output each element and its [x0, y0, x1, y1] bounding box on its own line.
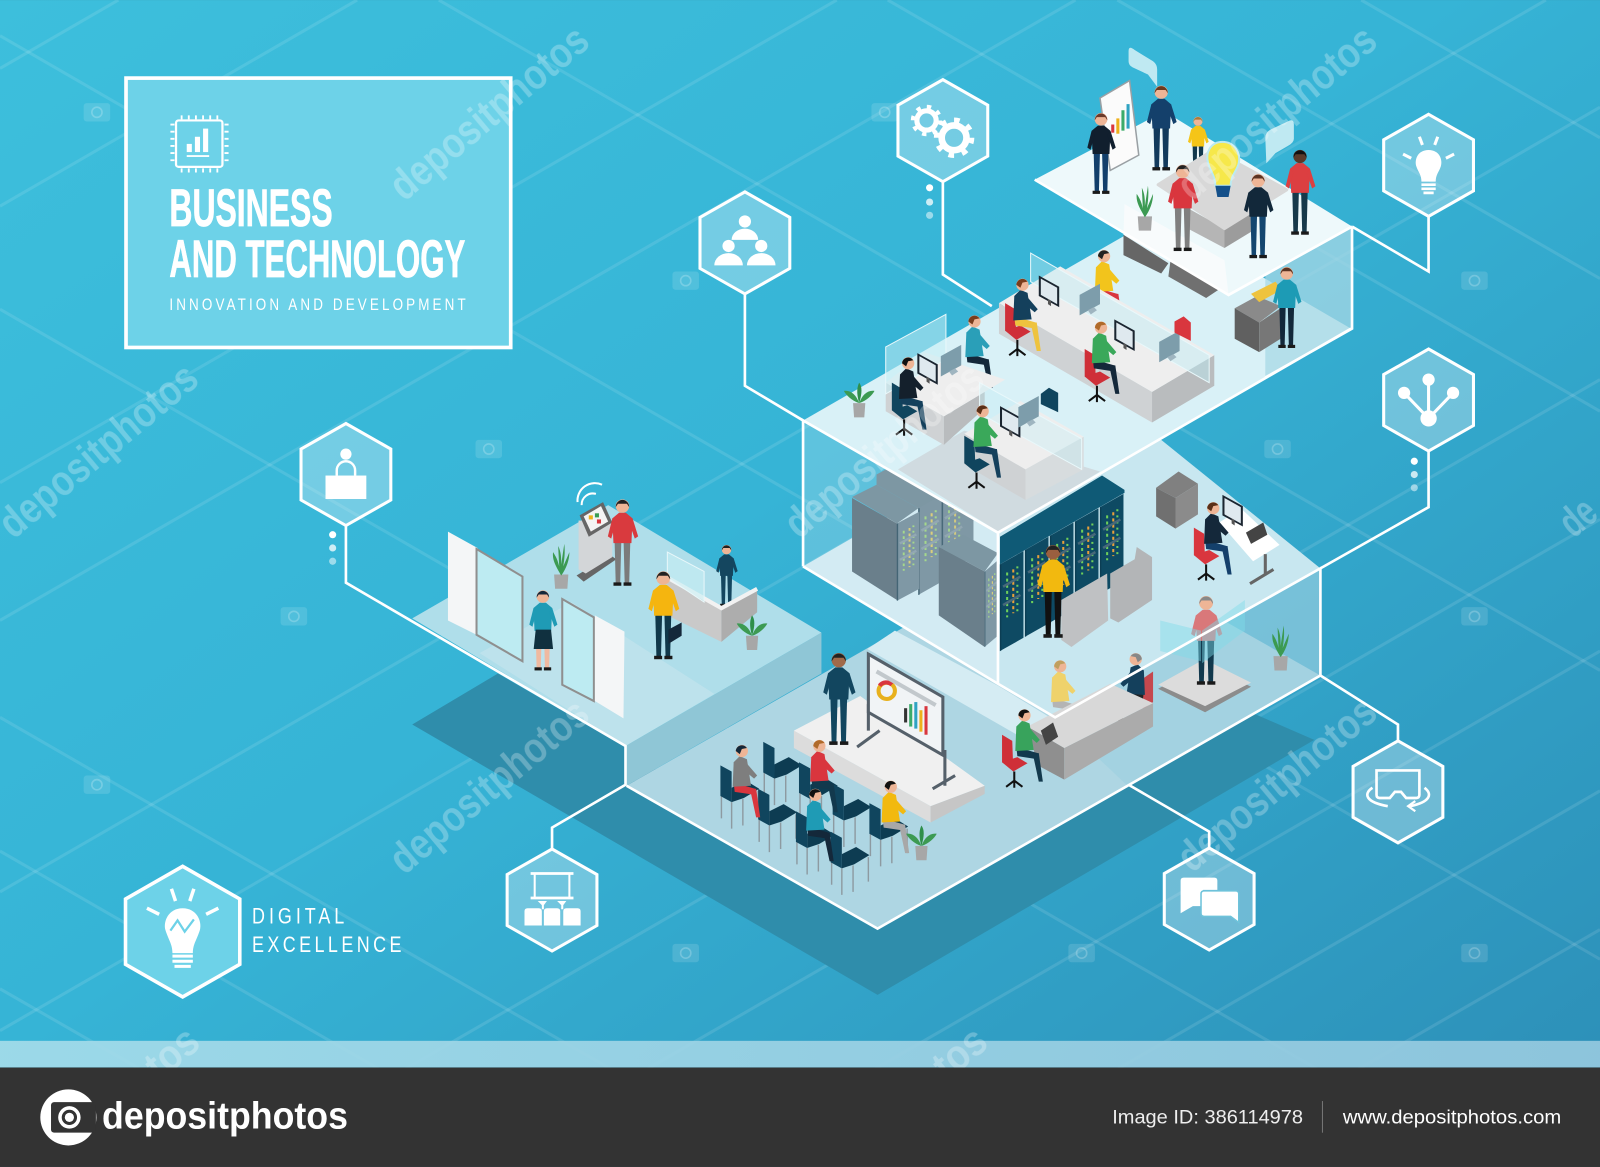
kiosk	[577, 502, 616, 582]
stage	[794, 696, 985, 822]
depositphotos logo	[40, 1089, 348, 1145]
VR platform	[1158, 659, 1251, 712]
speech bubble	[1129, 48, 1157, 87]
red chair	[1005, 303, 1031, 356]
back gray racks	[877, 461, 980, 595]
icon: chat bubbles	[1164, 848, 1254, 950]
holographic screens	[1160, 600, 1245, 663]
table	[1028, 684, 1153, 780]
icon: gears	[898, 80, 988, 182]
receptionist	[716, 545, 738, 606]
speech bubble	[1265, 120, 1294, 163]
white door panel right	[595, 615, 624, 718]
stock photo watermarks: tos	[923, 1016, 996, 1089]
icon: network	[1384, 349, 1473, 451]
room: server racks	[852, 461, 1280, 651]
icon: camera logo	[40, 1089, 96, 1145]
desk row C	[964, 383, 1084, 500]
digital excellence label: DIGITAL	[252, 905, 344, 929]
flipchart	[1100, 81, 1139, 170]
title panel	[126, 78, 511, 347]
structure outlines	[627, 180, 1352, 929]
floor: ground level	[627, 533, 1320, 929]
icon: reception	[301, 424, 391, 526]
technician in yellow	[1037, 545, 1070, 638]
programmer in black	[899, 357, 927, 430]
reception desk	[667, 552, 757, 642]
red chair back	[1143, 671, 1153, 709]
room: presentation	[720, 653, 985, 895]
monitors	[1039, 276, 1059, 307]
footer divider	[1322, 1101, 1323, 1133]
red chair	[1085, 349, 1110, 402]
plant	[1272, 626, 1289, 670]
glass door right	[562, 599, 594, 701]
image id: Image ID: 386114978	[1112, 1106, 1303, 1128]
white block	[1123, 204, 1229, 295]
plant	[737, 615, 767, 650]
glass door left	[477, 549, 522, 661]
person behind table	[1188, 117, 1209, 176]
digital excellence label: EXCELLENCE	[252, 933, 401, 958]
plant	[906, 826, 937, 860]
room: entrance lobby	[448, 483, 767, 718]
stock photo camera marks	[84, 103, 1488, 962]
stock photo watermarks: tos	[135, 1016, 209, 1089]
floor highlight	[867, 631, 1055, 737]
laptop	[1041, 722, 1058, 745]
stock photo watermarks: depositphotos	[380, 689, 598, 883]
digital excellence label	[252, 905, 401, 958]
woman at cabinet	[1273, 267, 1301, 348]
plant	[553, 544, 569, 589]
subheading: INNOVATION AND DEVELOPMENT	[169, 296, 466, 315]
cabinets below platform	[1123, 235, 1218, 298]
standing desk with developer	[1194, 495, 1280, 584]
filing cabinet	[1235, 282, 1282, 352]
seated man	[1117, 653, 1145, 726]
dark server racks	[1000, 476, 1124, 651]
gray rack block middle	[939, 535, 998, 647]
icon: chip with chart	[170, 115, 229, 172]
gray cabinet rear	[1156, 471, 1198, 529]
logo wordmark: depositphotos	[102, 1095, 348, 1138]
floor: entrance platform	[412, 505, 821, 786]
man in red	[1168, 165, 1198, 251]
audience chairs	[720, 742, 908, 895]
panel: server room floor	[803, 440, 1320, 717]
person with briefcase	[648, 571, 682, 659]
VR user	[1191, 596, 1222, 685]
icon: digital excellence bulb	[126, 866, 240, 997]
seated woman in green	[1015, 709, 1043, 782]
white door panel left	[448, 532, 478, 635]
person in teal	[965, 315, 993, 388]
woman entering	[529, 590, 557, 670]
seated yellow person	[1051, 660, 1079, 733]
floor 3: innovation platform	[1035, 48, 1352, 298]
gray cabinets	[1061, 547, 1152, 647]
heading: BUSINESS	[169, 179, 333, 238]
heading: AND TECHNOLOGY	[169, 230, 465, 289]
programmer yellow trousers	[1013, 279, 1041, 351]
stock photo watermarks: depositphotos	[1167, 687, 1386, 881]
ground shadow	[412, 674, 1314, 995]
glass wall left	[803, 420, 998, 684]
plant	[844, 383, 874, 417]
website url: www.depositphotos.com	[1342, 1106, 1561, 1128]
plant	[1137, 186, 1153, 231]
icon: projector audience	[507, 849, 597, 951]
chair	[964, 436, 990, 489]
woman in black	[1244, 174, 1273, 258]
chair	[892, 383, 917, 436]
seated audience	[733, 740, 909, 861]
whiteboard	[857, 654, 955, 789]
person at kiosk	[608, 499, 638, 586]
side wall glass right	[1055, 568, 1320, 786]
icon: team	[700, 192, 790, 294]
desk row A	[999, 250, 1214, 422]
light bulb	[1207, 142, 1239, 197]
icon: light bulb	[1384, 114, 1473, 216]
person in yellow	[1095, 250, 1122, 322]
presenter	[823, 653, 855, 745]
spare chair	[1174, 316, 1191, 341]
footer light band	[0, 1041, 1600, 1067]
programmer in green	[1092, 321, 1119, 394]
stock photo watermarks: depositphotos	[775, 353, 993, 547]
connector lines	[346, 182, 1429, 849]
glass partition	[1031, 253, 1209, 383]
woman at flipchart	[1087, 113, 1116, 194]
stairs	[898, 431, 1100, 533]
man presenting	[1147, 86, 1177, 170]
floor 2: office	[803, 216, 1352, 533]
room: VR area	[1158, 596, 1289, 712]
room: meeting table	[1002, 653, 1153, 788]
red chair	[1002, 735, 1028, 788]
heading	[169, 179, 465, 289]
icon: VR headset	[1353, 741, 1443, 843]
footer bar	[0, 1067, 1600, 1167]
gray rack block left	[852, 485, 919, 601]
man in red shirt	[1286, 150, 1315, 235]
idea table	[1158, 150, 1287, 248]
connector dots	[329, 184, 1418, 565]
programmer in green	[973, 405, 1001, 478]
wifi signal	[577, 483, 602, 505]
desk row B	[886, 314, 1005, 445]
